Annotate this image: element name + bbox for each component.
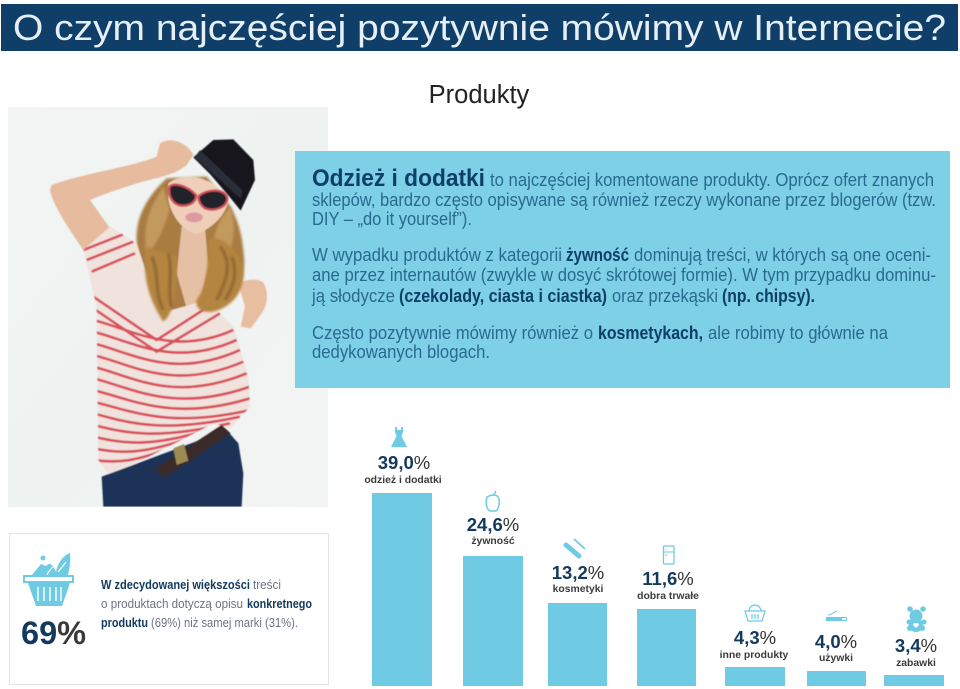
belt buckle [173,444,188,465]
bar: food: żywność [471,536,515,547]
sunglasses [169,185,227,210]
right hand [238,280,267,328]
bar: clothing: odzież i dodatki [364,475,442,486]
belt [155,425,231,478]
shirt [83,227,250,477]
paragraph: clothing: Odzież i dodatki [312,165,485,192]
paragraph: food: (czekolady, ciasta i ciastka) [399,286,607,306]
paragraph: cosmetics: Często pozytywnie mówimy również o [312,323,593,343]
callout text [101,578,312,630]
curls [152,247,235,310]
paragraph: food: dominują treści, w których są one oceni- [634,245,931,265]
paragraph: cosmetics: kosmetykach, [598,323,703,343]
bar: cosmetics [548,539,607,686]
section heading: Produkty [429,81,530,109]
bar: durable goods [637,546,699,686]
paragraph: cosmetics [312,323,889,362]
callout text: o produktach dotyczą opisu [101,597,243,611]
icon: basket with groceries [24,553,73,606]
bar: clothing [364,427,442,686]
bar: other products [720,605,789,686]
bar chart: product categories [364,427,944,686]
paragraph: clothing [312,165,936,229]
photo: woman in striped shirt and hat [8,107,328,507]
paragraph: food: (np. chipsy). [722,286,815,306]
hair over the shoulder [145,239,243,322]
bar: food: 24,6% [467,514,519,535]
bar: toys: zabawki [896,658,936,669]
paragraph: clothing: DIY – „do it yourself”). [312,209,472,229]
panel: description [295,151,950,388]
big number: 69% [21,615,86,651]
back hair [137,177,244,313]
bar: other products: 4,3% [734,627,776,648]
paragraph: cosmetics: ale robimy to głównie na [708,323,889,343]
face [168,177,228,234]
bar: clothing: 39,0% [378,452,430,473]
paragraph: food: W wypadku produktów z kategorii [312,245,562,265]
paragraph: food: oraz przekąski [612,286,718,306]
bar: food [463,491,523,686]
hat [193,139,255,211]
callout text: konkretnego [247,597,312,611]
bar: cosmetics: 13,2% [552,562,604,583]
hair strands beside the face [144,188,234,250]
paragraph: clothing: to najczęściej komentowane produkty. Oprócz ofert znanych [490,170,934,190]
callout: 69% specific product [10,534,328,684]
bar: durable goods: dobra trwałe [637,591,699,602]
bar: cosmetics: kosmetyki [553,584,604,595]
jeans [102,430,243,507]
bar: stimulants [807,611,866,686]
bar: toys: 3,4% [895,635,937,656]
callout text: W zdecydowanej większości [101,578,250,592]
paragraph: food [311,245,936,306]
paragraph: cosmetics: dedykowanych blogach. [312,342,490,362]
callout text: produktu [101,616,148,630]
raised arm [50,140,193,250]
bar: toys [884,606,944,686]
title bar: O czym najczęściej pozytywnie mówimy w Internecie? [13,7,946,48]
callout text: (69%) niż samej marki (31%). [151,616,298,630]
paragraph: food: ją słodycze [311,286,395,306]
bar: other products: inne produkty [720,650,789,661]
bar: durable goods: 11,6% [642,568,694,589]
paragraph: food: żywność [566,245,629,265]
neck and chest [177,227,208,308]
callout text: treści [253,578,281,592]
lips [185,212,203,222]
bar: stimulants: używki [819,653,853,664]
bar: stimulants: 4,0% [815,631,857,652]
